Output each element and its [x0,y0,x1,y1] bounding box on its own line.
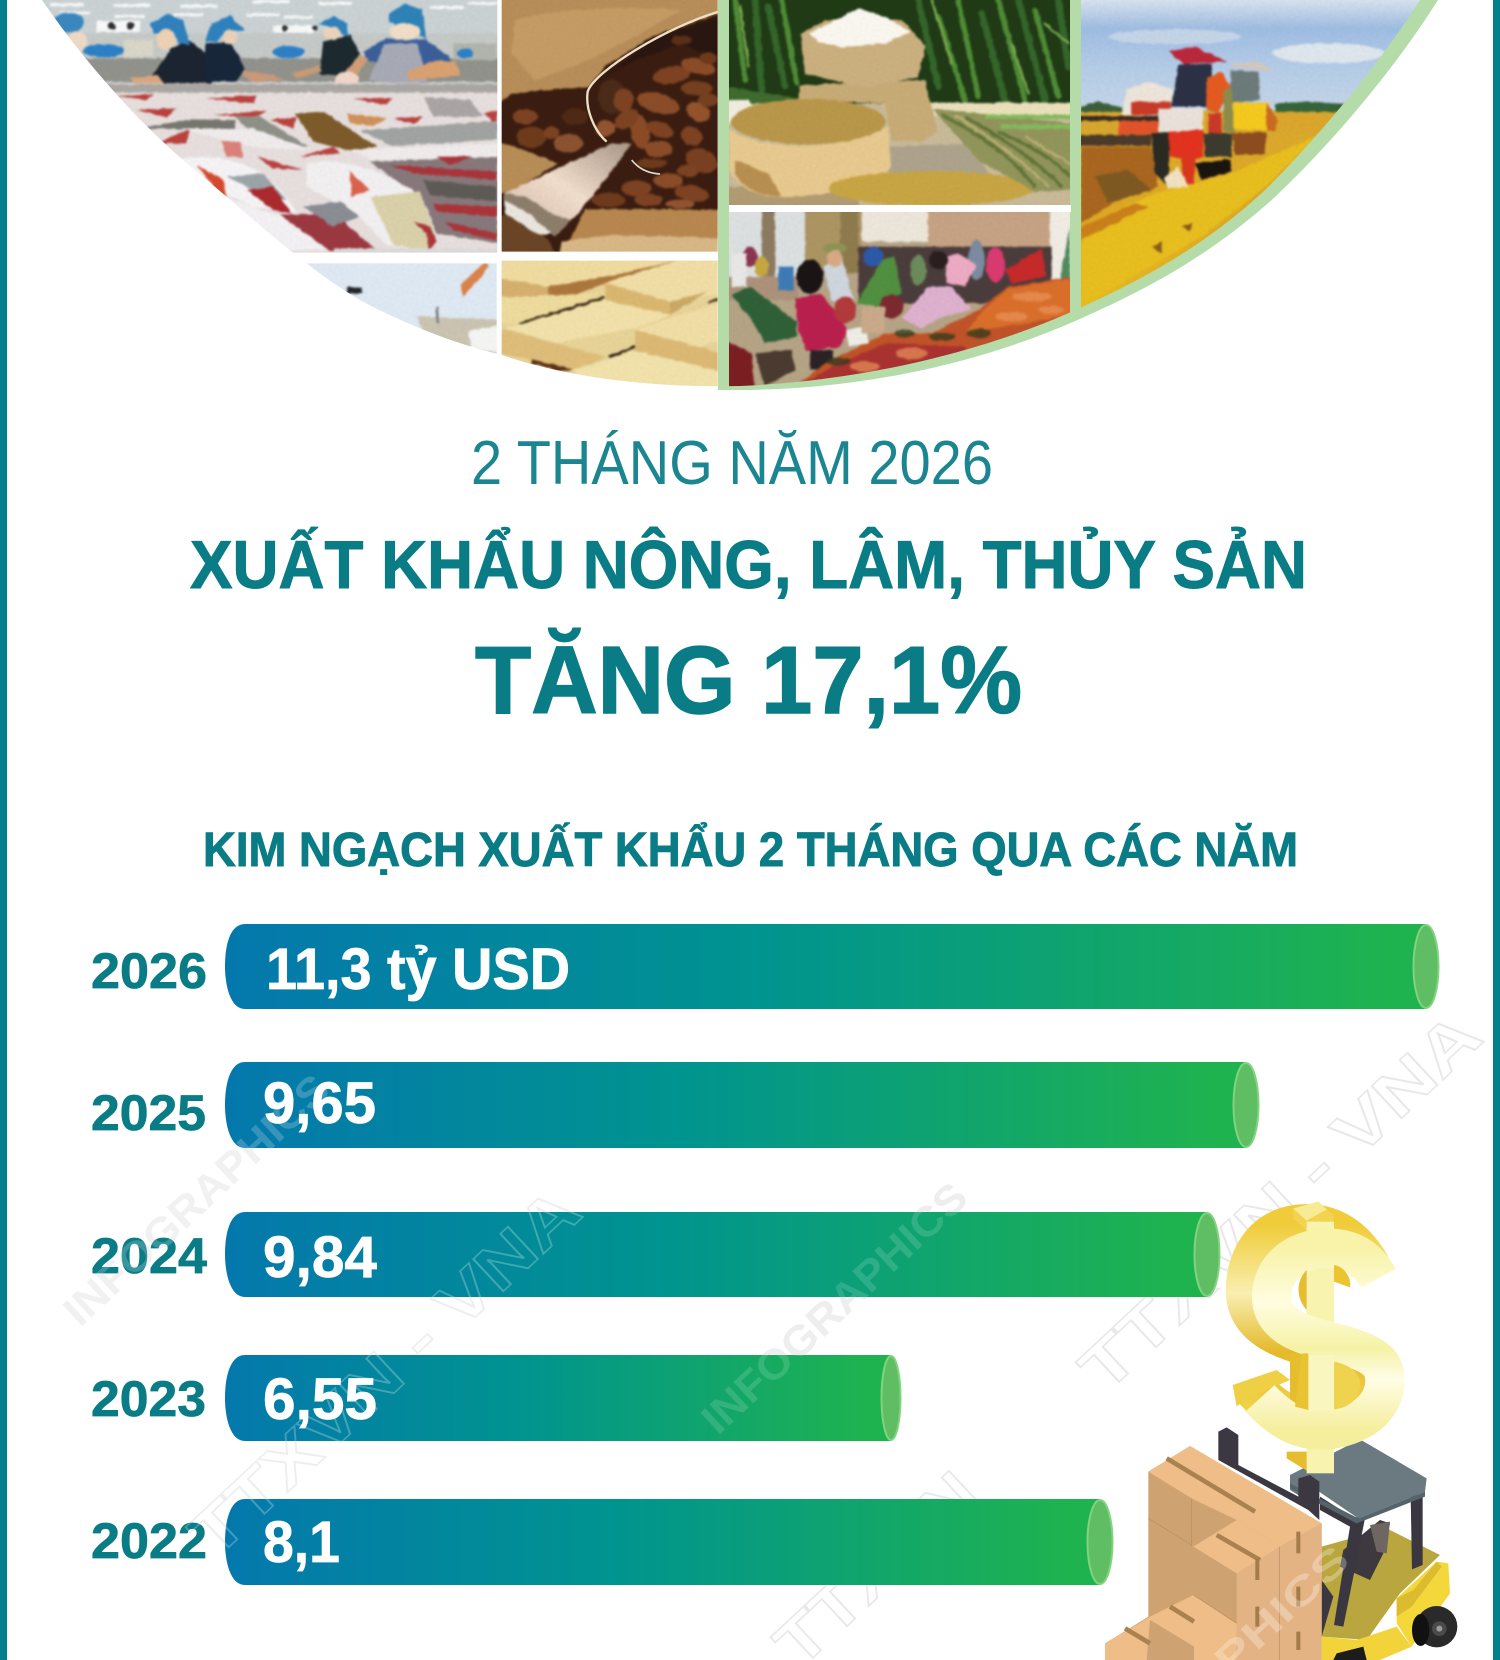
watermarks: INFOGRAPHICS [54,1065,338,1335]
photo: rice sack [718,0,1078,213]
bar: 2026 [91,924,1438,1009]
photo: combine harvester [1081,0,1420,308]
bar: 2022: 2022 [91,1513,207,1569]
bar: 2026: 2026 [91,943,207,999]
heading: growth figure: TĂNG 17,1% [475,627,1022,734]
green rim and dividers [718,0,1438,390]
heading: main title: XUẤT KHẨU NÔNG, LÂM, THỦY SẢN [190,526,1307,603]
watermarks: TTXVN - VNA [1065,998,1495,1405]
bar: 2023: 6,55 [263,1367,377,1432]
bar: 2025 [91,1062,1258,1148]
watermarks [54,998,1495,1660]
watermarks over bars [54,1065,976,1570]
watermarks over bars: TTXVN - VNA [175,1173,594,1570]
photo: coffee beans [502,0,718,252]
photo: lychee sellers [729,212,1070,386]
bar: 2022: 8,1 [263,1510,340,1575]
watermarks: TTXVN - VNA [175,1173,594,1570]
bar: 2025: 9,65 [263,1071,376,1136]
icon: dollar sign [1233,1202,1385,1473]
bar: 2022 [91,1499,1112,1585]
photo gutters [729,205,1071,212]
heading: period: 2 THÁNG NĂM 2026 [471,429,993,498]
photo: shrimp workers [307,263,497,354]
bar: 2023: 2023 [91,1371,206,1427]
watermarks: INFOGRAPHICS [692,1173,976,1443]
icon: stacked boxes [1105,1446,1322,1660]
illustration: forklift with boxes and gold dollar [1105,1202,1457,1660]
bar: 2023 [91,1355,900,1441]
photo collage [20,0,1455,400]
chart subtitle: KIM NGẠCH XUẤT KHẨU 2 THÁNG QUA CÁC NĂM [203,823,1298,877]
watermarks over bars: INFOGRAPHICS [54,1065,338,1335]
bar: 2026: 11,3 tỷ USD [266,937,570,1002]
bar chart [91,924,1438,1585]
photo: fish processing [42,0,498,253]
bar: 2024 [91,1212,1220,1297]
bar: 2024: 9,84 [263,1225,377,1290]
bar: 2025: 2025 [91,1085,206,1141]
bar: 2024: 2024 [91,1228,207,1284]
icon: forklift [1218,1427,1457,1660]
watermarks over bars: INFOGRAPHICS [692,1173,976,1443]
photo: timber [502,260,718,386]
